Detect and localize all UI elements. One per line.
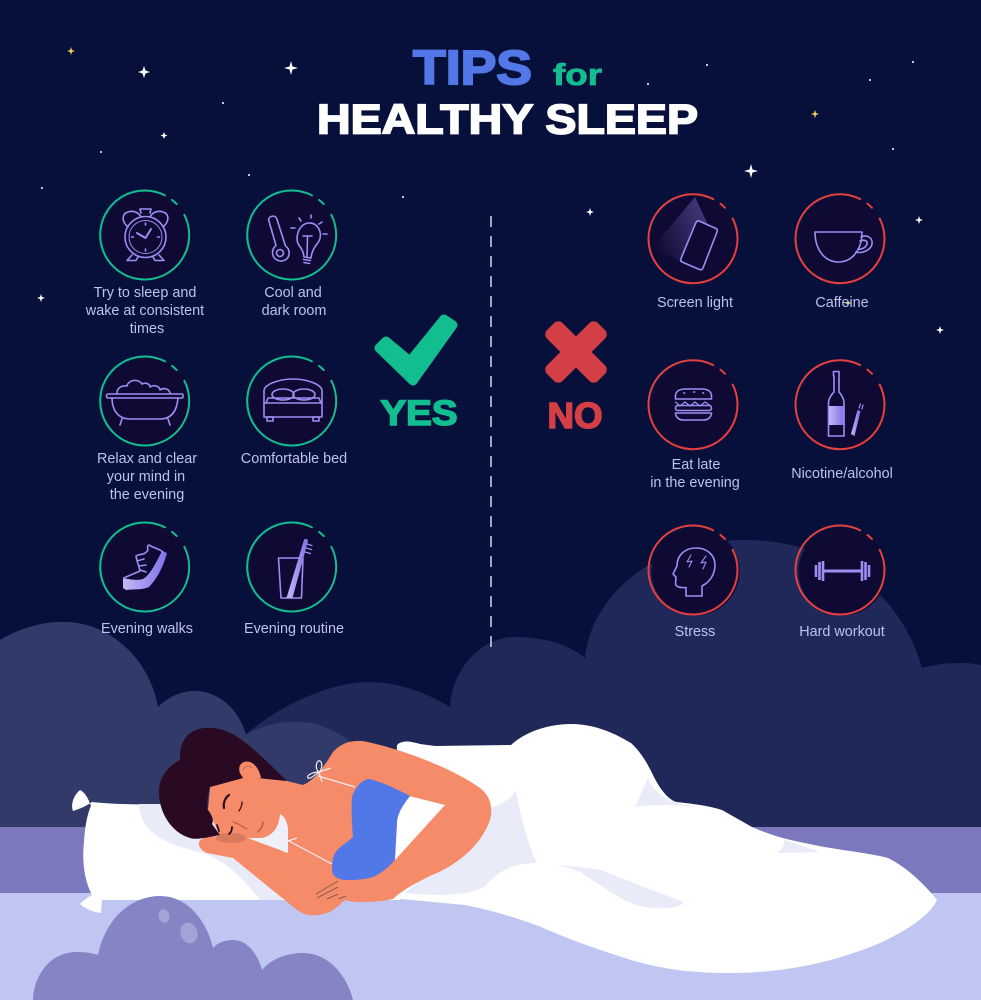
item: screen light: [648, 194, 740, 311]
icon: alarm clock: [123, 209, 168, 260]
ring: [247, 523, 338, 612]
ring: [648, 526, 740, 616]
label: Nicotine/alcohol: [791, 466, 893, 482]
tip: consistent times: [85, 191, 204, 337]
body, face and arms: [199, 741, 491, 915]
yes label: YES: [380, 394, 458, 433]
pillow shadow: [139, 804, 300, 900]
panel: yes tips: [85, 191, 347, 637]
icon: bottle and cigarette: [828, 372, 863, 436]
face details: [217, 795, 263, 834]
ear: [239, 762, 261, 778]
yes mark: [379, 319, 458, 433]
blanket shadow: waist: [635, 778, 720, 810]
title: TIPS: [413, 42, 532, 95]
label: Caffeine: [815, 295, 869, 311]
label: Screen light: [657, 295, 733, 311]
sleeping woman: [159, 728, 491, 915]
yellow stars: [67, 47, 851, 306]
label: your mind in: [107, 469, 185, 485]
tip: relax: [97, 357, 197, 503]
label: in the evening: [650, 475, 740, 491]
ring: [100, 357, 191, 446]
item: caffeine: [795, 194, 886, 311]
blanket shadow: leg: [778, 840, 820, 853]
item: stress: [648, 526, 740, 640]
blanket shadow: hip: [405, 790, 537, 895]
tip: comfortable bed: [241, 357, 347, 467]
label: the evening: [110, 487, 184, 503]
tip: evening walks: [100, 523, 193, 637]
label: Cool and: [264, 285, 322, 301]
title: for: [553, 57, 602, 92]
icon: phone with beam: [652, 197, 717, 270]
divider: [490, 216, 492, 648]
icon: cross mark: [543, 319, 609, 385]
blanket: [390, 724, 937, 973]
top garment: [332, 779, 410, 880]
title: HEALTHY SLEEP: [317, 96, 698, 142]
label: Comfortable bed: [241, 451, 347, 467]
ring: [100, 523, 191, 612]
ring: [795, 194, 886, 284]
label: Stress: [675, 624, 715, 640]
ring: [247, 191, 338, 280]
floor: wall band: [0, 827, 981, 893]
ring: [795, 360, 886, 450]
label: Hard workout: [799, 624, 885, 640]
label: times: [130, 321, 164, 337]
ring: [795, 526, 886, 616]
ring: [100, 191, 191, 280]
icon: thermometer and bulb: [268, 215, 327, 264]
gap between arm and chest: [393, 795, 445, 860]
title: [317, 42, 698, 142]
tip: evening routine: [244, 523, 344, 637]
icon: coffee cup: [815, 232, 872, 262]
blanket shadow: fold: [552, 865, 684, 908]
neck gap: [248, 814, 288, 853]
fingers: [316, 881, 346, 899]
icon: shoe: [123, 545, 167, 590]
pillow: [72, 790, 400, 913]
label: Evening walks: [101, 621, 193, 637]
ring: [247, 357, 338, 446]
shoulder strap with bow: [308, 761, 355, 787]
icon: toothbrush in glass: [278, 539, 312, 598]
icon: dumbbell: [816, 561, 869, 581]
panel: no tips: [648, 194, 893, 640]
floor: bed surface: [0, 893, 981, 1000]
icon: bathtub: [106, 380, 183, 425]
cloud highlights: [157, 908, 200, 945]
icon: head with lightning: [673, 548, 715, 596]
label: Evening routine: [244, 621, 344, 637]
ring: [648, 194, 740, 284]
icon: burger: [676, 389, 712, 420]
icon: check mark: [379, 319, 453, 381]
label: dark room: [262, 303, 326, 319]
arm strap with bow: [274, 832, 332, 864]
label: Try to sleep and: [94, 285, 196, 301]
foreground cloud: [33, 896, 353, 1000]
item: eat late: [648, 360, 740, 491]
item: nicotine and alcohol: [791, 360, 893, 482]
front cloud: [0, 622, 355, 830]
tip: cool dark room: [247, 191, 338, 319]
stars: [37, 61, 944, 334]
back cloud: [245, 540, 981, 830]
no label: NO: [548, 395, 602, 436]
icon: bed: [264, 379, 322, 421]
label: Eat late: [672, 457, 720, 473]
hair: [159, 728, 287, 839]
ring: [648, 360, 740, 450]
label: wake at consistent: [85, 303, 204, 319]
label: Relax and clear: [97, 451, 197, 467]
item: hard workout: [795, 526, 886, 640]
no mark: [543, 319, 609, 436]
arm shadow under head: [216, 833, 246, 843]
